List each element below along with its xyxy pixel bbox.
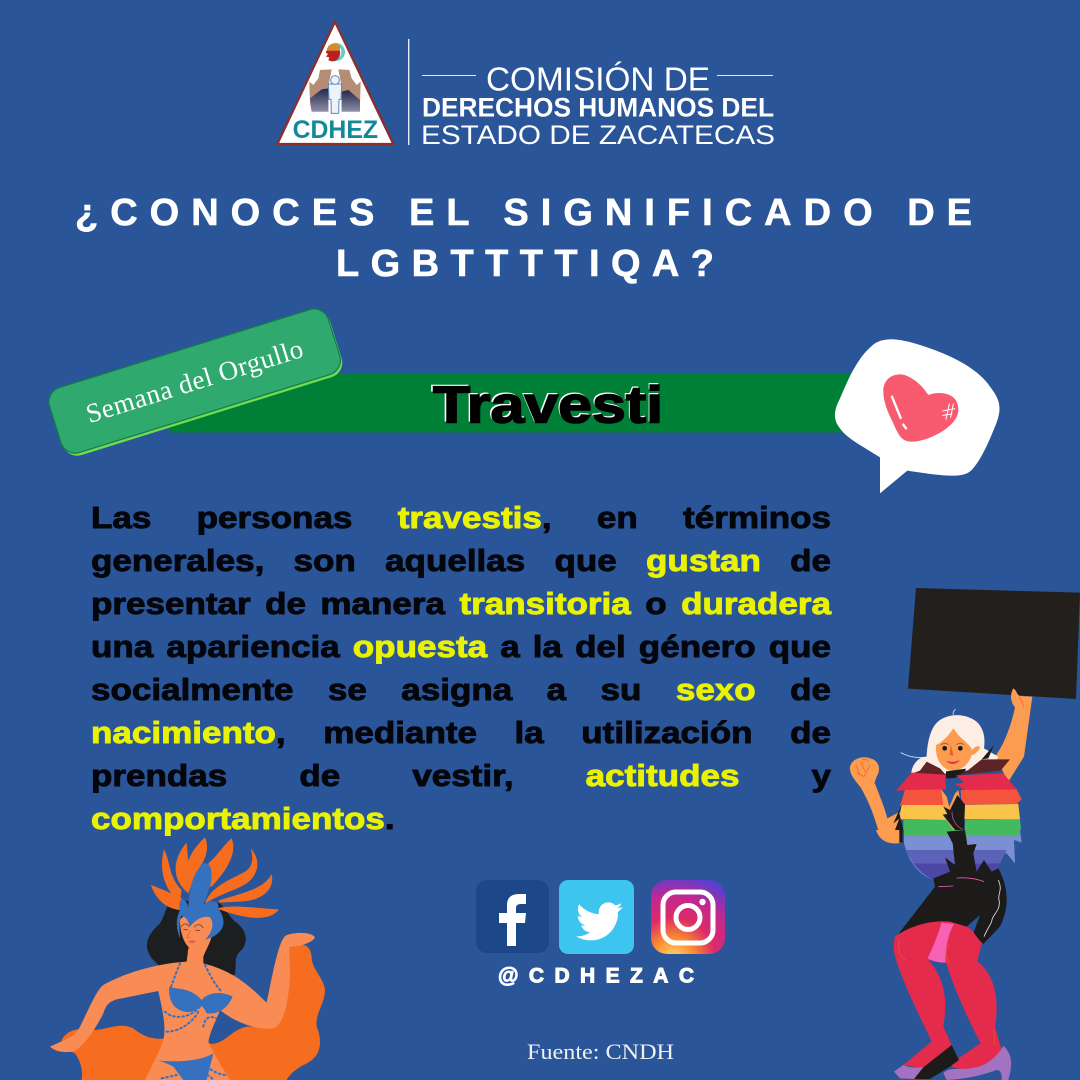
logo: CDHEZ triangle (277, 22, 393, 144)
logo: wordmark: ESTADO DE ZACATECAS (421, 120, 775, 150)
icon: Twitter (559, 880, 634, 954)
body paragraph: prendas de vestir, actitudes y (91, 758, 831, 793)
illustration: woman with placard and rainbow boa (850, 588, 1080, 1080)
body paragraph: socialmente se asigna a su sexo de (91, 672, 831, 707)
icon: Instagram (651, 880, 725, 954)
body paragraph: comportamientos. (91, 801, 395, 836)
body paragraph: una apariencia opuesta a la del género que (91, 629, 831, 664)
title: LGBTTTTIQA? (336, 243, 714, 285)
green banner bar (170, 374, 860, 432)
title: ¿CONOCES EL SIGNIFICADO DE (75, 192, 972, 234)
icon: Facebook (476, 880, 549, 953)
logo: wordmark: DERECHOS HUMANOS DEL (422, 92, 774, 122)
icon: speech bubble with heart (835, 339, 1000, 493)
body paragraph (91, 500, 832, 836)
logo: CDHEZ triangle: CDHEZ (293, 117, 378, 144)
logo: wordmark: COMISIÓN DE (486, 60, 710, 98)
placard and upper body (850, 588, 1080, 830)
lower body and legs (876, 830, 1022, 1080)
tag: Semana del Orgullo: Semana del Orgullo (82, 333, 307, 429)
banner heading: Travesti: Travesti (433, 376, 663, 434)
body paragraph: Las personas travestis, en términos (91, 500, 831, 535)
tag: Semana del Orgullo (45, 305, 346, 460)
social handle: @CDHEZAC (498, 964, 694, 988)
body paragraph: nacimiento, mediante la utilización de (91, 715, 831, 750)
illustration: carnival dancer (50, 837, 325, 1080)
body paragraph: generales, son aquellas que gustan de (91, 543, 831, 578)
banner heading: Travesti: Travesti (431, 375, 662, 433)
logo: divider (408, 39, 409, 145)
logo: wordmark (421, 60, 775, 150)
title (75, 192, 972, 285)
source note: Fuente: CNDH (527, 1039, 674, 1064)
body paragraph: presentar de manera transitoria o duradera (91, 586, 831, 621)
